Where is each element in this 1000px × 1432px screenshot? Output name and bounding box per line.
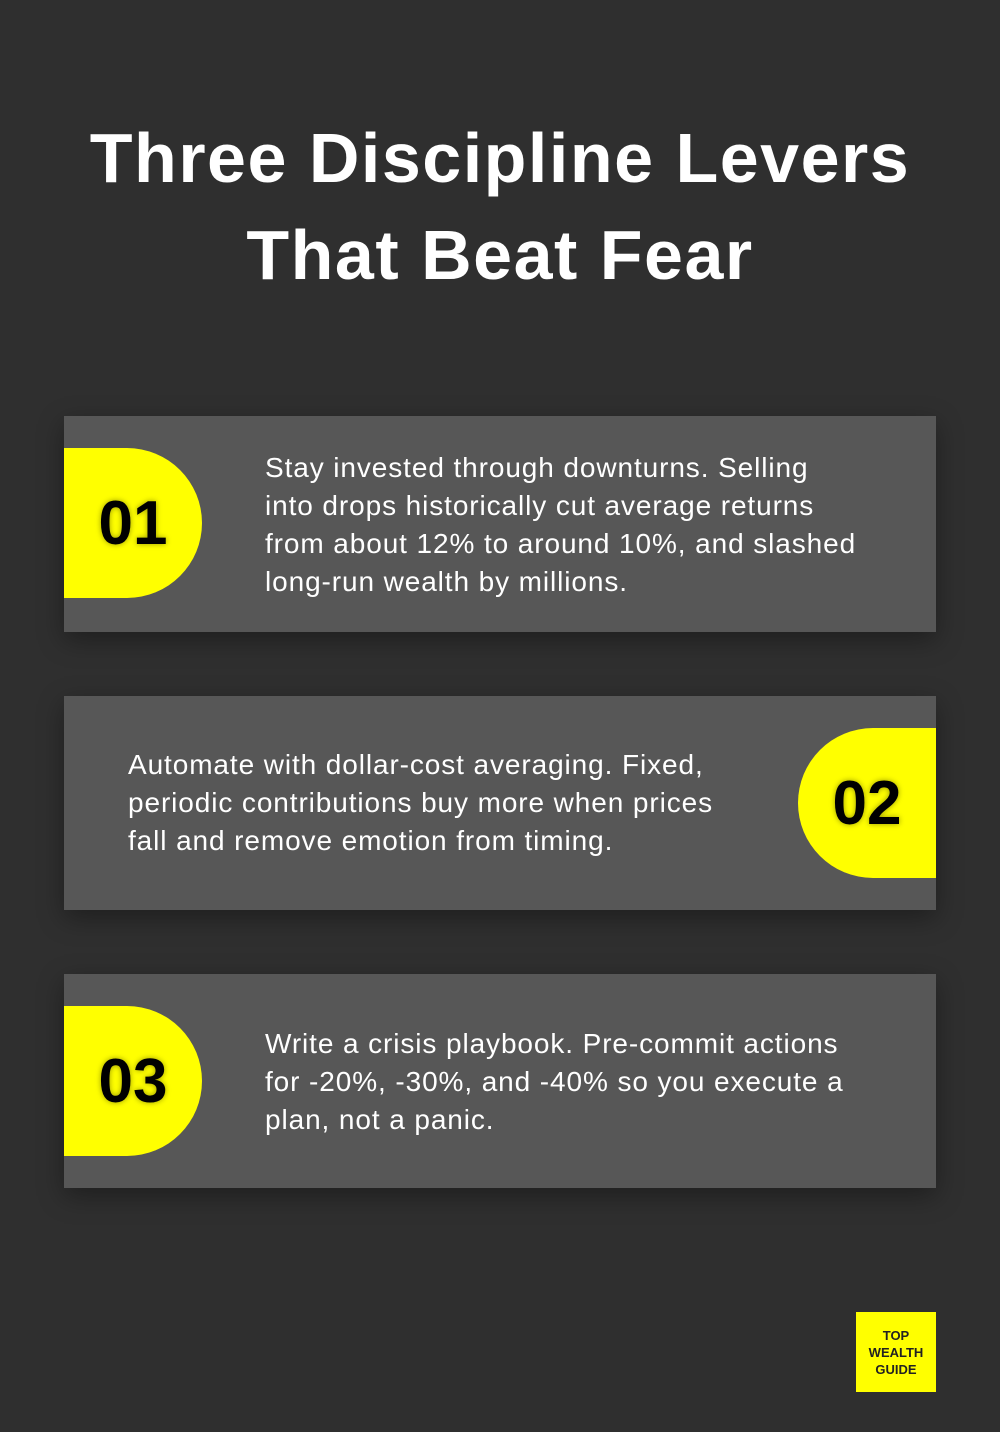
text 2: fall and remove emotion from timing. — [128, 825, 613, 856]
text 2 — [128, 749, 713, 856]
card 1 — [64, 416, 936, 632]
text 1: from about 12% to around 10%, and slashed — [265, 528, 856, 559]
text 3 — [265, 1028, 844, 1135]
badge 01: 01 — [99, 488, 167, 558]
badge 03 — [64, 1006, 202, 1156]
title — [90, 119, 910, 294]
card 3 — [64, 974, 936, 1188]
badge 03: 03 — [99, 1046, 167, 1116]
card 2 — [64, 696, 936, 910]
text 3: plan, not a panic. — [265, 1104, 494, 1135]
text 1 — [265, 452, 856, 597]
text 2: periodic contributions buy more when prices — [128, 787, 713, 818]
text 1: long-run wealth by millions. — [265, 566, 628, 597]
badge 01 — [64, 448, 202, 598]
title: That Beat Fear — [246, 216, 754, 294]
logo — [856, 1312, 936, 1392]
text 2: Automate with dollar-cost averaging. Fixed, — [128, 749, 704, 780]
badge 02: 02 — [833, 768, 901, 838]
text 3: for -20%, -30%, and -40% so you execute a — [265, 1066, 844, 1097]
text 1: into drops historically cut average returns — [265, 490, 814, 521]
logo: TOP — [883, 1328, 909, 1342]
text 1: Stay invested through downturns. Selling — [265, 452, 808, 483]
text 3: Write a crisis playbook. Pre-commit actions — [265, 1028, 838, 1059]
logo: GUIDE — [875, 1362, 917, 1376]
logo: WEALTH — [869, 1344, 923, 1360]
title: Three Discipline Levers — [90, 119, 910, 197]
badge 02 — [798, 728, 936, 878]
